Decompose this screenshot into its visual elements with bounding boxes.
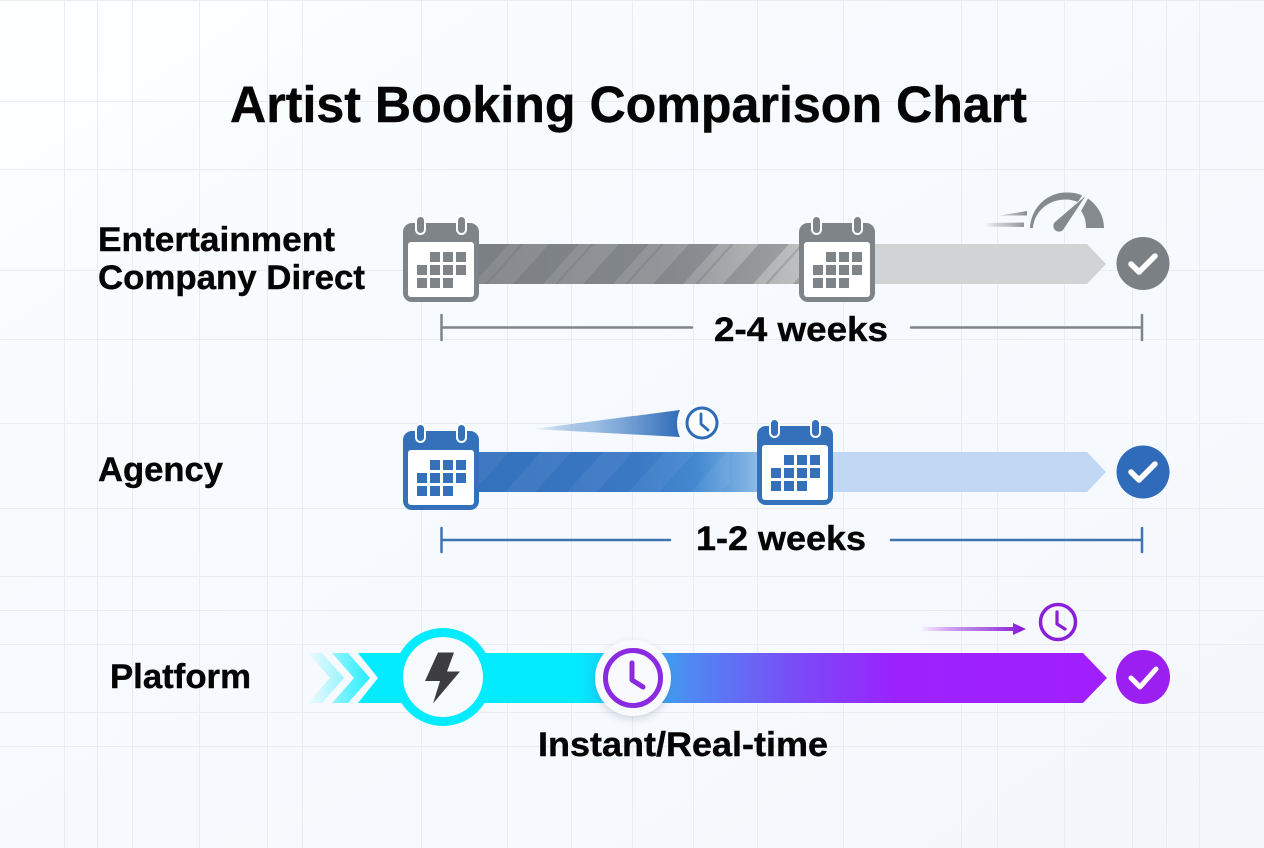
timeline arrow bar: cyan to purple [358, 653, 1107, 703]
timeline arrow bar: grey [479, 244, 1106, 284]
icon: calendar midpoint [799, 216, 875, 302]
icon: calendar start [403, 424, 479, 510]
chevrons: fading speed trail [308, 653, 370, 703]
duration label: Instant/Real-time: Instant/Real-time [538, 726, 828, 764]
icon: calendar midpoint [757, 419, 833, 505]
row: Entertainment Company Direct [98, 192, 1170, 349]
duration bracket: 1-2 weeks: 1-2 weeks [696, 520, 866, 558]
icon: completed check purple [1116, 650, 1170, 704]
row label: Entertainment Company Direct: Entertainment [98, 221, 335, 259]
icon: small arrow and clock [922, 604, 1076, 640]
icon: speed wedge and clock [533, 403, 722, 443]
duration bracket: 1-2 weeks [442, 520, 1142, 558]
row label: Platform: Platform [110, 658, 251, 696]
icon: completed check grey [1116, 237, 1170, 290]
row: Platform [110, 604, 1170, 764]
icon: lightning in cyan ring [394, 628, 492, 726]
title: Artist Booking Comparison Chart [230, 76, 1027, 133]
row: Agency [98, 403, 1170, 558]
row label: Agency: Agency [98, 451, 223, 489]
row label: Entertainment Company Direct: Company Direct [98, 259, 365, 297]
timeline arrow bar: blue [479, 452, 1106, 492]
icon: calendar start [403, 216, 479, 302]
icon: completed check blue [1116, 446, 1170, 498]
duration bracket: 2-4 weeks [442, 311, 1142, 349]
icon: clock on white disc [595, 640, 671, 716]
icon: speedometer [985, 192, 1104, 232]
duration bracket: 2-4 weeks: 2-4 weeks [714, 311, 888, 349]
